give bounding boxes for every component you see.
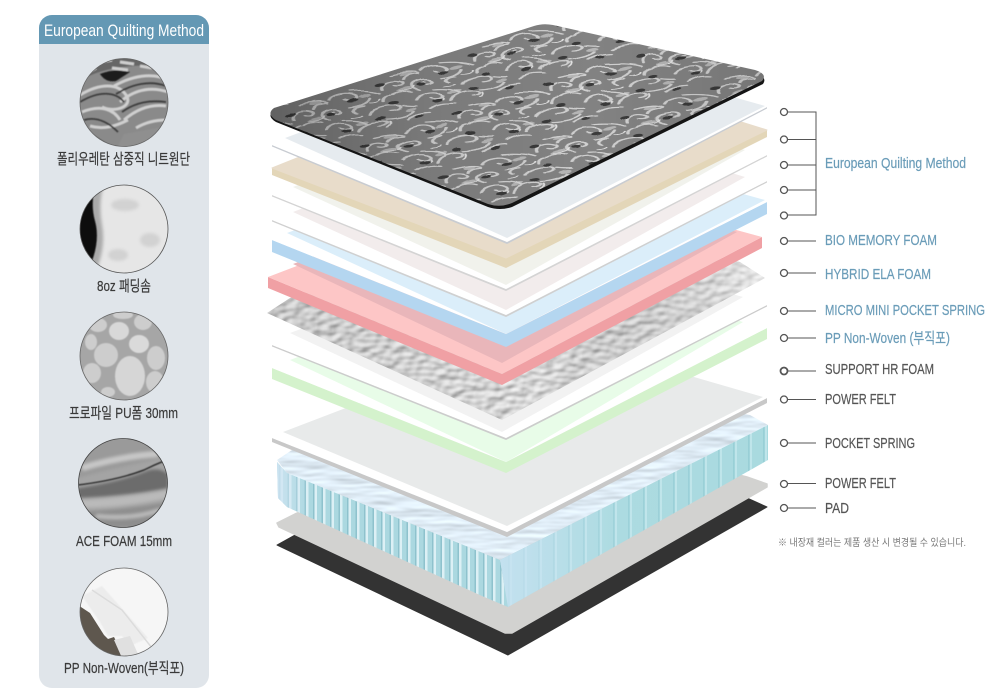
material: knit fabric swatch <box>78 55 170 150</box>
label: profile PU foam: 프로파일 PU폼 30mm <box>69 405 178 422</box>
label: Hybrid ELA Foam: HYBRID ELA FOAM <box>825 266 931 283</box>
material: PP non-woven swatch <box>78 566 170 659</box>
label: Power Felt lower: POWER FELT <box>825 475 896 492</box>
material: padding cotton swatch <box>78 183 170 275</box>
layer: PP non-woven sheet <box>272 240 767 440</box>
layer: bio memory foam <box>272 138 767 347</box>
layer: quilting beige foam <box>272 60 767 268</box>
material: ACE foam swatch <box>78 438 168 528</box>
layer labels <box>825 155 985 517</box>
label: Bio Memory Foam: BIO MEMORY FOAM <box>825 232 937 249</box>
footnote: ※ 내장재 컬러는 제품 생산 시 변경될 수 있습니다. <box>778 536 966 549</box>
label: knit fabric: 폴리우레탄 삼중직 니트원단 <box>57 151 190 168</box>
layer: pocket spring <box>277 380 768 607</box>
panel: European Quilting Method materials <box>39 15 209 688</box>
label: Support HR Foam: SUPPORT HR FOAM <box>825 361 934 378</box>
leader bracket: European Quilting Method <box>780 108 816 219</box>
layer: quilting white sheet <box>272 43 767 244</box>
panel header: European Quilting Method <box>44 21 204 40</box>
label: ACE foam: ACE FOAM 15mm <box>76 533 172 550</box>
exploded mattress stack <box>250 10 780 655</box>
label: PP non-woven: PP Non-Woven(부직포) <box>64 660 184 677</box>
label: Pad: PAD <box>825 500 849 517</box>
layer: black pad <box>277 440 767 655</box>
label: Pocket Spring: POCKET SPRING <box>825 435 915 452</box>
label: European Quilting Method: European Quilting Method <box>825 155 966 172</box>
label: PP Non-Woven: PP Non-Woven (부직포) <box>825 330 950 347</box>
layer: quilting non-woven sheet <box>272 116 767 317</box>
layer: lower power felt <box>277 420 767 633</box>
layer: quilted mattress top <box>270 24 764 209</box>
label: padding cotton: 8oz 패딩솜 <box>97 278 151 295</box>
layer: micro mini pocket spring <box>267 215 765 420</box>
layer: support HR foam <box>272 263 767 473</box>
panel header <box>39 15 209 44</box>
label: Power Felt upper: POWER FELT <box>825 391 896 408</box>
layer: quilting padding sheet <box>272 90 767 291</box>
layer: upper power felt sheet <box>272 333 767 537</box>
leader lines for individual layers <box>780 238 816 512</box>
material: profile PU foam swatch <box>78 310 170 402</box>
layer: hybrid ELA foam <box>268 175 762 385</box>
